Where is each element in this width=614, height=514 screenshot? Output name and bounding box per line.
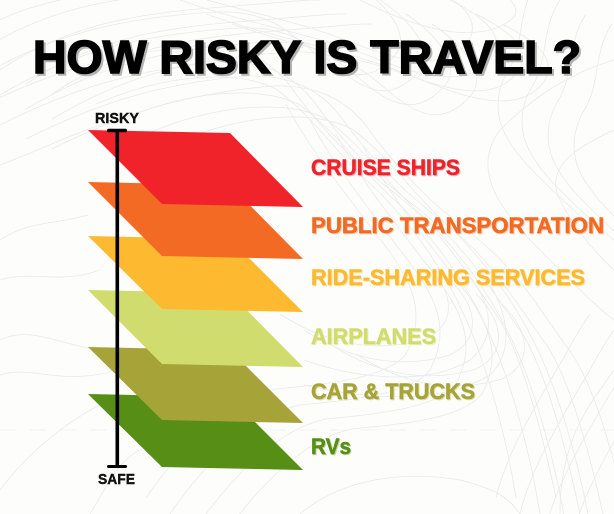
layer: cars and trucks	[88, 347, 303, 423]
layer: RVs	[88, 394, 303, 470]
label: airplanes: AIRPLANES	[311, 324, 436, 349]
label: cars and trucks: CAR & TRUCKS	[312, 380, 476, 405]
risk axis	[95, 110, 139, 488]
layer: cruise ships	[88, 130, 303, 207]
label: ride-sharing services: RIDE-SHARING SERVICES	[312, 266, 586, 291]
layer: public transportation	[88, 182, 303, 259]
layer: airplanes	[88, 290, 303, 367]
label: public transportation: PUBLIC TRANSPORTATION	[312, 214, 605, 239]
label: cars and trucks: CAR & TRUCKS	[311, 379, 475, 404]
label: cruise ships: CRUISE SHIPS	[312, 156, 461, 181]
label: cruise ships: CRUISE SHIPS	[311, 155, 460, 180]
title: HOW RISKY IS TRAVEL?	[35, 33, 583, 85]
label: airplanes: AIRPLANES	[312, 325, 437, 350]
label: RVs: RVs	[312, 435, 352, 460]
axis label: safe: SAFE	[98, 471, 135, 488]
title: HOW RISKY IS TRAVEL?	[33, 31, 581, 83]
layer: ride-sharing services	[88, 236, 303, 312]
label: public transportation: PUBLIC TRANSPORTATION	[311, 213, 604, 238]
layer stack chart	[88, 130, 303, 470]
label: RVs: RVs	[311, 434, 351, 459]
label: ride-sharing services: RIDE-SHARING SERVICES	[311, 265, 585, 290]
axis label: risky: RISKY	[95, 110, 139, 127]
